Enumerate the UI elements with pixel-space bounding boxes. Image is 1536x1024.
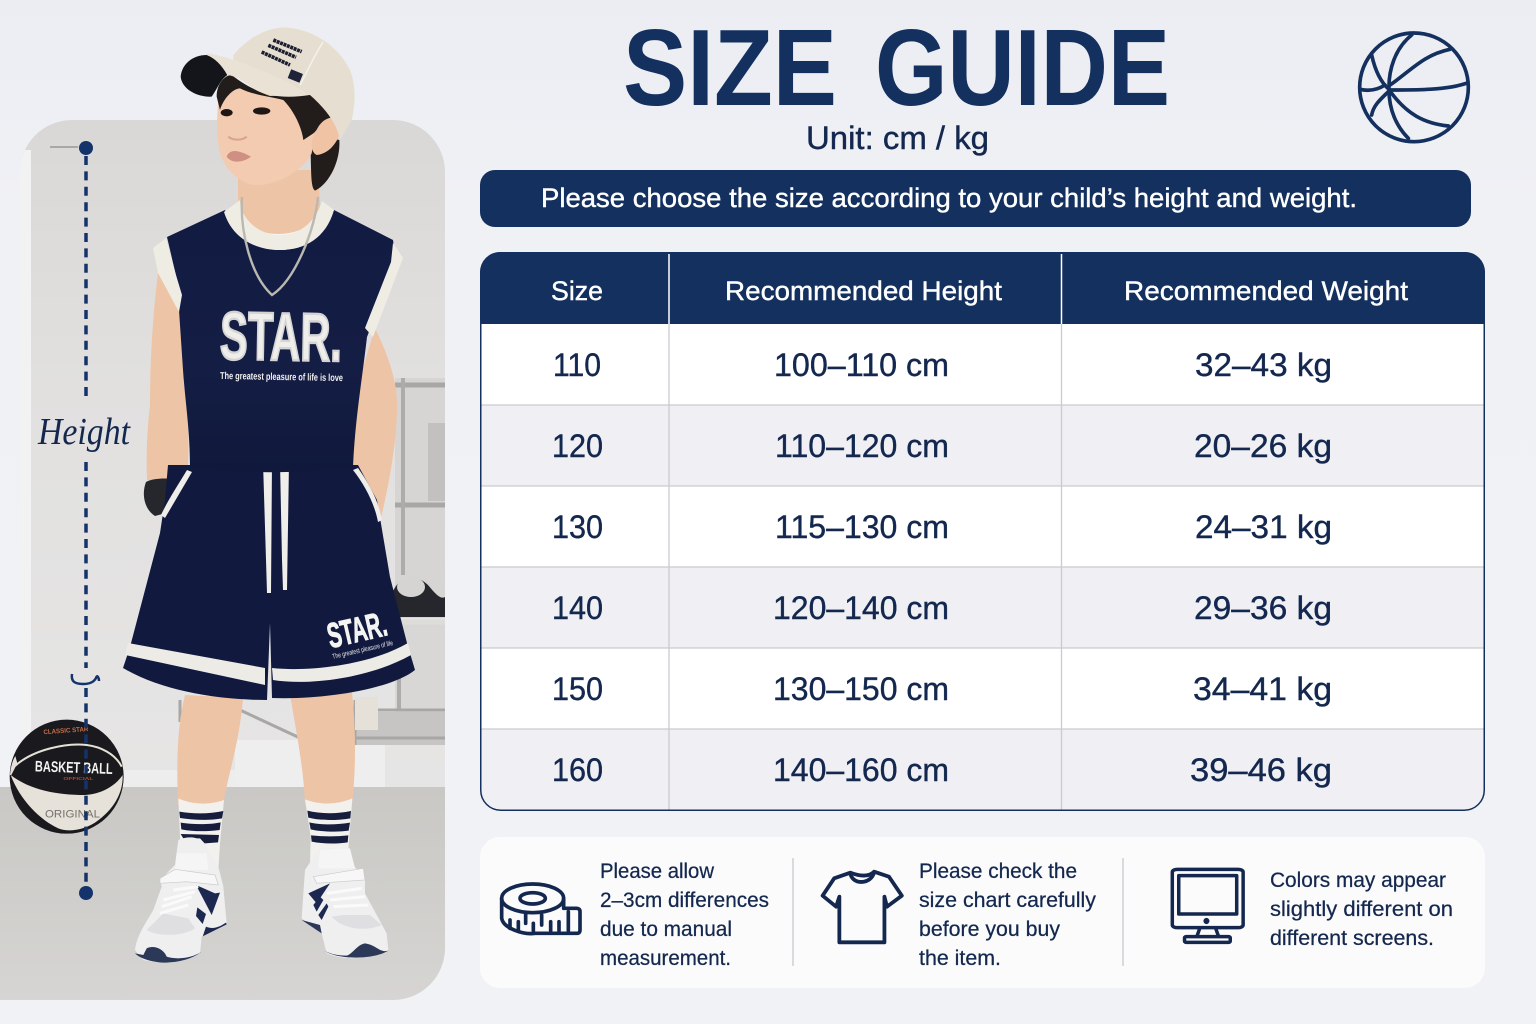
eyes	[221, 109, 233, 116]
basketball: BASKET BALL	[35, 758, 113, 778]
neck and undershirt	[238, 170, 322, 235]
shorts logo: The greatest pleasure of life	[332, 640, 394, 661]
icon: measuring tape	[502, 884, 580, 934]
row 110: 100–110 cm	[774, 347, 949, 383]
right sneaker	[302, 848, 388, 958]
drawstrings	[263, 462, 289, 593]
row 150	[552, 671, 1332, 707]
right sock	[305, 798, 352, 867]
row 130: 24–31 kg	[1195, 509, 1332, 545]
height measure line	[37, 141, 131, 900]
table rows background	[481, 260, 1484, 811]
row 130	[552, 509, 1332, 545]
row 130: 115–130 cm	[775, 509, 949, 545]
note: measurement: due to manual	[600, 918, 732, 941]
cap brim	[207, 53, 309, 97]
tank top: The greatest pleasure of life is love	[220, 371, 343, 384]
hair fringe	[217, 75, 331, 140]
shorts logo	[323, 604, 394, 661]
title: SIZE	[623, 7, 837, 129]
row 160: 140–160 cm	[773, 752, 949, 788]
note: measurement: 2–3cm differences	[600, 889, 769, 912]
table values	[552, 347, 1332, 788]
basketball: ORIGINAL	[45, 808, 100, 820]
collar	[224, 200, 334, 250]
shelf	[390, 378, 445, 720]
table header	[480, 252, 1485, 324]
shorts	[123, 462, 415, 700]
row 150: 150	[552, 671, 603, 707]
row 110	[553, 347, 1332, 383]
table header: Recommended Height	[725, 276, 1002, 306]
size table	[480, 252, 1485, 811]
legs	[177, 695, 243, 805]
panel: care notes	[480, 837, 1485, 988]
note: size chart: before you buy	[919, 918, 1060, 941]
note: measurement: measurement.	[600, 947, 731, 970]
cap embroidery	[262, 40, 302, 65]
table header: Recommended Weight	[1124, 276, 1409, 306]
cap crown	[233, 27, 355, 140]
row 110: 110	[553, 347, 601, 383]
necklace	[242, 197, 318, 295]
left sock	[178, 798, 224, 870]
note: screen colors: different screens.	[1270, 927, 1434, 950]
nose	[228, 137, 247, 140]
icon: monitor	[1172, 869, 1243, 942]
back hair	[310, 133, 339, 191]
row 120: 110–120 cm	[775, 428, 949, 464]
note: size chart: size chart carefully	[919, 889, 1096, 912]
right arm	[352, 328, 397, 522]
title	[623, 7, 1170, 129]
note: screen colors: slightly different on	[1270, 898, 1453, 921]
photo background room	[0, 120, 445, 1000]
face	[217, 87, 317, 185]
mouth	[227, 151, 251, 162]
instruction banner	[480, 170, 1471, 227]
panel: product photo	[0, 27, 445, 1000]
sleeve trims	[153, 238, 182, 312]
shorts logo: STAR.	[323, 605, 391, 656]
socks and sneakers	[135, 798, 388, 963]
note: size chart: Please check the	[919, 860, 1077, 883]
row 160: 160	[552, 752, 603, 788]
note: size chart	[919, 860, 1096, 970]
row 120	[552, 428, 1332, 464]
icon: basketball	[1360, 33, 1468, 142]
note: measurement	[600, 860, 769, 970]
note: measurement: Please allow	[600, 860, 715, 883]
row 110: 32–43 kg	[1195, 347, 1332, 383]
shirt logo: STAR.	[219, 298, 343, 376]
row 120: 120	[552, 428, 603, 464]
table header: Size	[551, 276, 603, 306]
row 120: 20–26 kg	[1194, 428, 1332, 464]
boy figure	[123, 27, 415, 963]
title: GUIDE	[875, 7, 1170, 129]
left arm	[147, 273, 188, 482]
row 130: 130	[552, 509, 603, 545]
height label: Height	[37, 411, 131, 453]
note: size chart: the item.	[919, 947, 1001, 970]
instruction banner: Please choose the size according to your child’s height and weight.	[541, 183, 1357, 213]
note: screen colors: Colors may appear	[1270, 869, 1446, 892]
ear	[312, 118, 341, 155]
wire rack and baseboard	[123, 697, 445, 787]
tank top	[153, 197, 403, 472]
unit subtitle: Unit: cm / kg	[806, 120, 989, 156]
row 150: 34–41 kg	[1193, 671, 1332, 707]
row 160: 39–46 kg	[1190, 752, 1332, 788]
row 140: 29–36 kg	[1194, 590, 1332, 626]
watch	[144, 478, 182, 516]
icon: t-shirt	[823, 872, 902, 942]
row 140: 120–140 cm	[773, 590, 949, 626]
cap brim underside	[181, 55, 227, 97]
row 140: 140	[552, 590, 603, 626]
basketball	[10, 720, 124, 834]
row 140	[552, 590, 1332, 626]
basketball: CLASSIC STAR	[43, 726, 89, 736]
basketball: OFFICIAL	[63, 776, 94, 781]
left sneaker	[135, 837, 227, 962]
row 160	[552, 752, 1332, 788]
note: screen colors	[1270, 869, 1453, 950]
head	[181, 27, 355, 191]
row 150: 130–150 cm	[773, 671, 949, 707]
